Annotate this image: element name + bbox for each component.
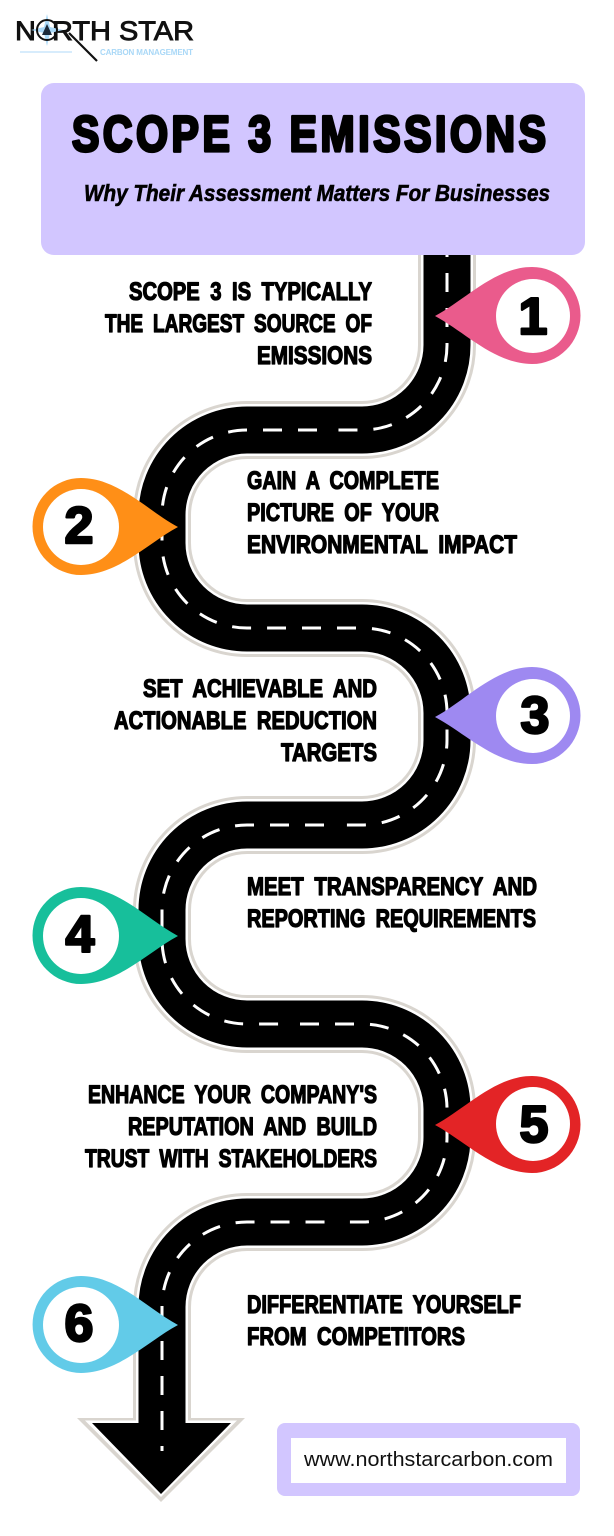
point 4 text: MEET TRANSPARENCY AND [247,873,537,901]
point 5 text: REPUTATION AND BUILD [128,1113,377,1141]
website url: www.northstarcarbon.com [303,1449,553,1471]
pin 5: 5 [520,1096,548,1154]
title: SCOPE 3 EMISSIONS [72,106,546,162]
point 2 text: PICTURE OF YOUR [247,499,439,527]
point 3 text: TARGETS [281,739,377,767]
point 1 text [105,278,372,370]
point 1 text: EMISSIONS [257,342,372,370]
pin 4: 4 [66,906,95,964]
point 6 text: DIFFERENTIATE YOURSELF [247,1291,521,1319]
point 3 text: SET ACHIEVABLE AND [143,675,377,703]
arrowhead [92,1423,231,1494]
icon: compass star [31,14,63,46]
arrowhead outline [77,1418,245,1502]
point 2 text [247,467,517,559]
logo slash [69,33,97,61]
pin 4 [32,887,178,984]
pin 3: 3 [521,687,549,745]
logo wordmark: N RTH STAR [15,16,194,46]
point 4 text: REPORTING REQUIREMENTS [247,905,536,933]
pin 5 [435,1076,580,1173]
point 6 text [247,1291,521,1351]
website box [277,1423,580,1496]
road [77,250,447,1502]
logo tagline: CARBON MANAGEMENT [100,48,193,57]
subtitle: Why Their Assessment Matters For Businesses [84,180,550,206]
pin 1 [435,267,580,364]
pin 2: 2 [65,497,93,555]
pin 1: 1 [519,288,547,346]
point 5 text [85,1081,377,1173]
logo: North Star Carbon Management [15,14,194,61]
point 5 text: ENHANCE YOUR COMPANY'S [88,1081,377,1109]
point 4 text [247,873,537,933]
point 2 text: ENVIRONMENTAL IMPACT [247,531,517,559]
panel: title banner [41,83,585,255]
pin 2 [32,478,178,575]
point 6 text: FROM COMPETITORS [247,1323,465,1351]
point 2 text: GAIN A COMPLETE [247,467,439,495]
point 3 text [114,675,377,767]
logo underline [20,51,72,53]
point 3 text: ACTIONABLE REDUCTION [114,707,377,735]
pin 6: 6 [65,1295,93,1353]
road centre dashes [162,250,447,1451]
point 1 text: THE LARGEST SOURCE OF [105,310,372,338]
point 1 text: SCOPE 3 IS TYPICALLY [129,278,372,306]
point 5 text: TRUST WITH STAKEHOLDERS [85,1145,377,1173]
pin 6 [33,1276,178,1373]
pin 3 [435,667,580,764]
